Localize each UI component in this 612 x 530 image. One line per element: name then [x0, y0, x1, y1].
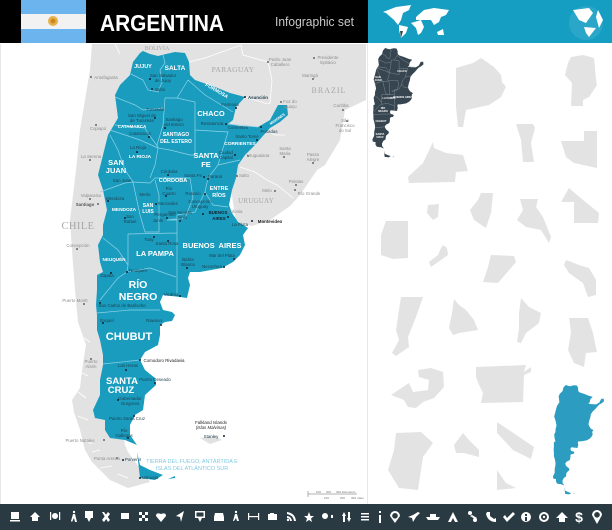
map: cities in Argentina: Gobernador: [118, 396, 142, 401]
map: cities in Argentina: Comodoro Rivadavia: [144, 358, 185, 363]
map: cities outside Argentina: Caballero: [271, 62, 290, 67]
map: cities outside Argentina: [62, 55, 355, 461]
map: cities in Argentina: Porvenir: [125, 457, 142, 462]
small dark map of Argentina: CHACO: [397, 69, 407, 73]
small dark map of Argentina: SAN: [375, 75, 381, 79]
map: cities outside Argentina: Alegre: [307, 157, 320, 162]
map: cities outside Argentina: Pedro Juan: [269, 57, 292, 62]
map: cities outside Argentina: Río Grande: [298, 191, 321, 196]
map: cities outside Argentina: Colonia: [228, 209, 243, 214]
map: cities outside Argentina: Puerto Montt: [62, 298, 88, 303]
map: cities outside Argentina: Melo: [262, 188, 272, 193]
map: province name labels: RÍO: [129, 278, 147, 291]
icon: information circle: [521, 512, 531, 522]
map: cities in Argentina: Merlo: [140, 192, 151, 197]
icon: phone: [486, 512, 496, 522]
map: cities in Argentina: Gregores: [121, 401, 140, 406]
small dark map of Argentina: CHUBUT: [376, 119, 387, 123]
map: cities in Argentina: Falkland Islands: [195, 420, 228, 425]
map: province name labels: CATAMARCA: [118, 124, 147, 129]
map: province name labels: ENTRE: [210, 186, 229, 192]
map: cities outside Argentina: Francisco: [335, 123, 355, 128]
map: cities in Argentina: Capital: [219, 155, 233, 160]
map: cities in Argentina: Posadas: [260, 129, 278, 134]
map: cities in Argentina: San: [126, 214, 134, 219]
map: cities in Argentina: del Estero: [164, 122, 184, 127]
map: province name labels: SANTIAGO: [163, 132, 189, 138]
map: cities in Argentina: de Tucumán: [130, 118, 155, 123]
map: cities in Argentina: Uruguay: [192, 204, 209, 209]
map: cities in Argentina: San Nicolás: [168, 210, 193, 215]
icon: globe: [569, 6, 603, 40]
icon: world map: [383, 5, 449, 38]
map: province name labels: JUJUY: [134, 64, 152, 70]
header blue panel: [368, 0, 612, 43]
map: province name labels: NEUQUÉN: [103, 255, 126, 262]
icon: info bar: [379, 511, 381, 523]
map: cities outside Argentina: Santiago: [76, 202, 95, 207]
map: cities in Argentina: Bahía: [182, 257, 194, 262]
icon: walking person: [233, 511, 239, 521]
map: province name labels: SANTA: [106, 376, 138, 387]
icon: ship: [426, 514, 440, 520]
small dark map of Argentina: BUENOS AIRES: [393, 95, 413, 99]
icon: rss: [287, 512, 296, 521]
icon: heart: [156, 513, 166, 522]
panel: main map frame: [0, 44, 368, 504]
map: cities in Argentina: Paraná: [208, 174, 223, 179]
icon: speech pin: [85, 511, 93, 522]
scale bar: [308, 490, 364, 500]
map: cities in Argentina: San Juan: [113, 178, 132, 183]
map: cities in Argentina: Catamarca: [129, 131, 151, 136]
map: cities in Argentina: Puerto Deseado: [139, 377, 171, 382]
map: cities outside Argentina: La Serena: [81, 154, 102, 159]
map: cities outside Argentina: Maria: [280, 151, 291, 156]
map: cities in Argentina: Resistencia: [201, 121, 224, 126]
icon: dollar sign: $: [575, 509, 583, 525]
map: cities outside Argentina: Antofagasta: [94, 75, 118, 80]
map: province name labels: LA PAMPA: [136, 249, 174, 258]
map: cities in Argentina: Puerto Santa Cruz: [109, 416, 145, 421]
map: cities outside Argentina: Aisén: [86, 364, 97, 369]
map: cities in Argentina: Mercedes: [158, 201, 178, 206]
map: cities outside Argentina: Valparaíso: [81, 193, 102, 198]
map: Tierra del Fuego label: [146, 458, 238, 472]
icon: monitor: [195, 511, 205, 522]
map: cities in Argentina: Santa Fe: [184, 173, 202, 178]
map: neighbouring country labels: BRAZIL: [312, 86, 346, 95]
icon: location pin: [390, 511, 400, 523]
map: cities outside Argentina: Copiapó: [90, 126, 107, 131]
map: cities in Argentina: Ushuaia: [142, 475, 159, 480]
small dark map of Argentina: NEGRO: [378, 109, 388, 113]
province silhouette panel: [381, 55, 599, 490]
scale bar: 200: [326, 490, 331, 494]
map: province name labels: RÍOS: [212, 191, 226, 199]
map: cities in Argentina: Santiago: [165, 117, 183, 122]
map: province name labels: BUENOS AIRES: [183, 241, 241, 250]
scale bar: 300 miles: [351, 496, 364, 500]
map: cities in Argentina: La Rioja: [130, 145, 147, 150]
map: province name labels: SAN: [108, 158, 124, 167]
icon: up arrow home: [556, 512, 568, 522]
map: cities in Argentina: Blanca: [181, 262, 195, 267]
map: province name labels: FORMOSA: [204, 82, 229, 100]
icon: train: [10, 512, 20, 522]
map: cities in Argentina: Córdoba: [161, 169, 178, 174]
map: cities in Argentina: de Jujuy: [155, 78, 172, 83]
map: cities outside Argentina: São: [341, 118, 349, 123]
icon: crossed tools: [102, 512, 110, 522]
map: cities outside Argentina: Epitácio: [320, 60, 336, 65]
map: cities in Argentina: Rawson: [146, 318, 162, 323]
icon: up down arrows: [342, 512, 351, 522]
map: cities outside Argentina: Passo: [307, 152, 320, 157]
map: province name labels: CRUZ: [108, 385, 134, 396]
icon: car: [214, 513, 224, 521]
map: neighbouring country labels: CHILE: [62, 221, 94, 232]
map: grey South America land: [70, 44, 366, 488]
small dark map of Argentina: SANTA: [376, 132, 384, 136]
map: cities in Argentina: Las Heras: [118, 363, 139, 368]
map: Tierra del Fuego label: TIERRA DEL FUEGO, ANTÁRTIDA E: [146, 458, 238, 465]
map: cities in Argentina: (Islas Malvinas): [196, 425, 227, 430]
map: Tierra del Fuego label: ISLAS DEL ATLÁNTICO SUR: [156, 465, 228, 472]
map: cities in Argentina: Mar del Plata: [209, 253, 235, 258]
icon: airplane: [408, 512, 420, 522]
map: province name labels: SALTA: [165, 65, 186, 72]
small dark map of Argentina: [372, 48, 423, 157]
map: province name labels: AIRES: [212, 216, 226, 221]
map: cities in Argentina: Mendoza: [106, 196, 125, 201]
map: cities outside Argentina: Uruguaiana: [247, 153, 270, 158]
scale bar: 200: [340, 496, 345, 500]
map: cities outside Argentina: Puerto: [85, 359, 98, 364]
map: cities outside Argentina: Pelotas: [289, 179, 304, 184]
subtitle: Infographic set: [275, 14, 354, 29]
map: neighbouring country labels: URUGUAY: [238, 197, 274, 205]
map: cities in Argentina: San Salvador: [150, 73, 177, 78]
map: cities outside Argentina: do Sul: [339, 128, 351, 133]
blue silhouette of Argentina: [553, 385, 604, 494]
map: cities in Argentina: [98, 73, 283, 480]
map: cities in Argentina: La Plata: [232, 222, 249, 227]
scale bar: 100: [324, 496, 329, 500]
map: cities outside Argentina: Presidente: [318, 55, 339, 60]
map: province name labels: MISIONES: [269, 112, 286, 126]
map: cities outside Argentina: Iguaçu: [283, 104, 297, 109]
map: cities in Argentina: Río: [166, 186, 173, 191]
map: cities in Argentina: Pergamino: [154, 212, 176, 217]
map: province name labels: FE: [201, 160, 211, 169]
map: cities outside Argentina: Foz do: [283, 99, 297, 104]
map: cities in Argentina: Tucumán: [146, 107, 165, 112]
icon: bed: [248, 513, 259, 520]
header bar: [0, 0, 368, 43]
icon: mail: [121, 513, 129, 519]
map: province name labels: LA RIOJA: [129, 154, 152, 160]
map: cities in Argentina: Rafael: [124, 219, 136, 224]
map: cities in Argentina: Cuarto: [162, 191, 176, 196]
small dark map of Argentina: CRUZ: [376, 135, 384, 139]
icon: check mark: [503, 512, 515, 522]
icon: star: [304, 512, 314, 522]
map: cities in Argentina: Necochea: [202, 264, 222, 269]
map: cities in Argentina: Corrientes: [228, 125, 249, 130]
map: cities outside Argentina: Maringá: [302, 73, 318, 78]
icon: Argentine flag: [21, 0, 86, 43]
icon: radiation: [539, 512, 549, 522]
map: province name labels: SANTA: [193, 151, 219, 160]
map: cities in Argentina: Toay: [144, 237, 154, 242]
map: cities outside Argentina: Curitiba: [333, 103, 349, 108]
icon: hiker: [71, 511, 77, 522]
map: province name labels: CORRIENTES: [224, 141, 257, 147]
map: province name labels: JUAN: [106, 166, 126, 175]
icon: tent: [448, 512, 458, 522]
map: province name labels: [103, 64, 286, 396]
scale bar: 100: [316, 490, 321, 494]
map: neighbouring country labels: PARAGUAY: [212, 65, 255, 74]
map: cities in Argentina: Montevideo: [258, 219, 283, 224]
map: cities in Argentina: Asunción: [248, 95, 268, 100]
map: cities in Argentina: Concepción: [188, 199, 212, 204]
map: cities in Argentina: Junín: [153, 218, 164, 223]
scale bar: 300 kilometers: [336, 490, 356, 494]
map: cities in Argentina: Rosario: [185, 191, 201, 196]
small dark map of Argentina: RÍO: [381, 105, 385, 110]
icon: map pin: [592, 510, 602, 524]
icon: globe marker: [322, 513, 333, 519]
map: cities in Argentina: Zapala: [100, 273, 114, 278]
map: province name labels: DEL ESTERO: [160, 139, 192, 145]
small dark map of Argentina: LA PAMPA: [382, 96, 396, 100]
map: cities outside Argentina: Concepción: [66, 243, 90, 248]
icon: list: [361, 513, 369, 520]
map: cities in Argentina: Formosa: [221, 102, 239, 107]
map: cities in Argentina: Santo Tomé: [235, 134, 259, 139]
map: cities in Argentina: San Carlos de Bariloche: [98, 303, 146, 308]
map: province name labels: CÓRDOBA: [159, 176, 187, 184]
map: province name labels: NEGRO: [119, 291, 157, 303]
small dark map of Argentina: JUAN: [374, 78, 382, 82]
map: cities outside Argentina: Punta Arenas: [94, 456, 121, 461]
map: neighbouring country labels: [62, 46, 346, 232]
map: cities in Argentina: Stanley: [204, 434, 219, 439]
icon: home: [30, 512, 40, 521]
map: cities outside Argentina: Santa: [279, 146, 291, 151]
map: cities in Argentina: Junín: [177, 215, 188, 220]
map: cities in Argentina: Salta: [155, 87, 166, 92]
map: province name labels: CHACO: [197, 109, 225, 118]
map: Argentina provinces: [93, 51, 288, 480]
map: province name labels: SAN: [143, 203, 154, 209]
map: cities in Argentina: Gallegos: [115, 433, 133, 438]
map: cities in Argentina: Esquel: [100, 318, 114, 323]
footer icon bar: [0, 504, 612, 530]
map: province name labels: CHUBUT: [106, 331, 152, 343]
map: province name labels: MENDOZA: [112, 207, 137, 213]
map: cities in Argentina: Río: [121, 428, 128, 433]
title: ARGENTINA: [100, 10, 224, 36]
map: province name labels: LUIS: [142, 209, 154, 215]
map: cities in Argentina: Santa Rosa: [156, 241, 179, 246]
map: cities outside Argentina: Salto: [239, 173, 250, 178]
icon: percent: [468, 511, 477, 522]
map: cities outside Argentina: Puerto Natales: [65, 438, 95, 443]
map: cities in Argentina: Ciudad: [219, 150, 234, 155]
map: neighbouring country labels: BOLIVIA: [145, 46, 170, 52]
icon: network: [139, 512, 148, 521]
icon: paper plane: [176, 511, 184, 522]
map: cities in Argentina: San Miguel de: [128, 113, 157, 118]
icon: restaurant: [50, 512, 60, 520]
map: province name labels: BUENOS: [209, 210, 227, 215]
map: cities in Argentina: Neuquén: [129, 268, 147, 273]
map: cities in Argentina: Viedma: [164, 292, 179, 297]
icon: camera: [268, 513, 277, 520]
